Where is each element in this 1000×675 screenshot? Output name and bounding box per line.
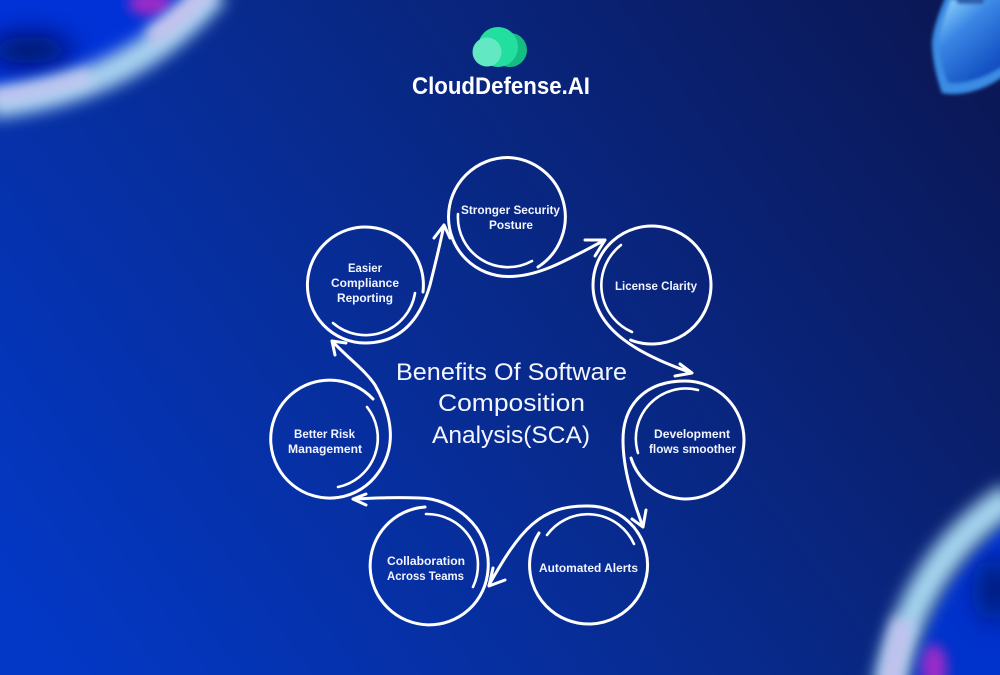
step: Stronger Security Posture: Stronger Security [461,205,561,217]
step: Development flows smoother [623,381,744,527]
logo wordmark: CloudDefense.AI [412,73,590,100]
title [396,359,627,449]
step: Collaboration Across Teams: Across Teams [387,571,464,583]
step: Collaboration Across Teams: Collaboration [387,556,465,568]
decorative glow: top left [0,0,215,104]
step: Development flows smoother: Development [654,429,730,441]
ring and arrow to License Clarity [448,158,605,277]
step: Better Risk Management [271,341,390,498]
step: Automated Alerts [489,506,648,624]
step: Easier Compliance Reporting: Compliance [331,278,399,290]
title: Analysis(SCA) [432,422,590,449]
step: License Clarity: License Clarity [615,281,698,293]
title: Benefits Of Software [396,359,627,386]
step: Stronger Security Posture: Posture [489,220,533,232]
decorative glow: bottom right [888,497,1000,675]
ring and arrow to Automated Alerts [623,381,744,527]
step: License Clarity [593,226,711,376]
ring and arrow to Development [593,226,711,376]
icon: shield [932,0,1000,94]
step: Stronger Security Posture [448,158,605,277]
step: Easier Compliance Reporting: Reporting [337,293,393,305]
step: Better Risk Management: Better Risk [294,429,356,441]
ring and arrow to Collaboration [489,506,648,624]
step: Automated Alerts: Automated Alerts [539,563,638,575]
step: Development flows smoother: flows smoother [649,444,737,456]
step: Easier Compliance Reporting [307,225,450,343]
step: Collaboration Across Teams [353,494,488,625]
icon: cloud [472,27,527,67]
title: Composition [438,390,585,417]
ring and arrow to Easier Compliance [271,341,390,498]
ring and arrow to Better Risk Management [353,494,488,625]
step: Better Risk Management: Management [288,444,362,456]
logo [412,27,590,100]
ring and arrow to Stronger Security [307,225,450,343]
step: Easier Compliance Reporting: Easier [348,263,383,275]
